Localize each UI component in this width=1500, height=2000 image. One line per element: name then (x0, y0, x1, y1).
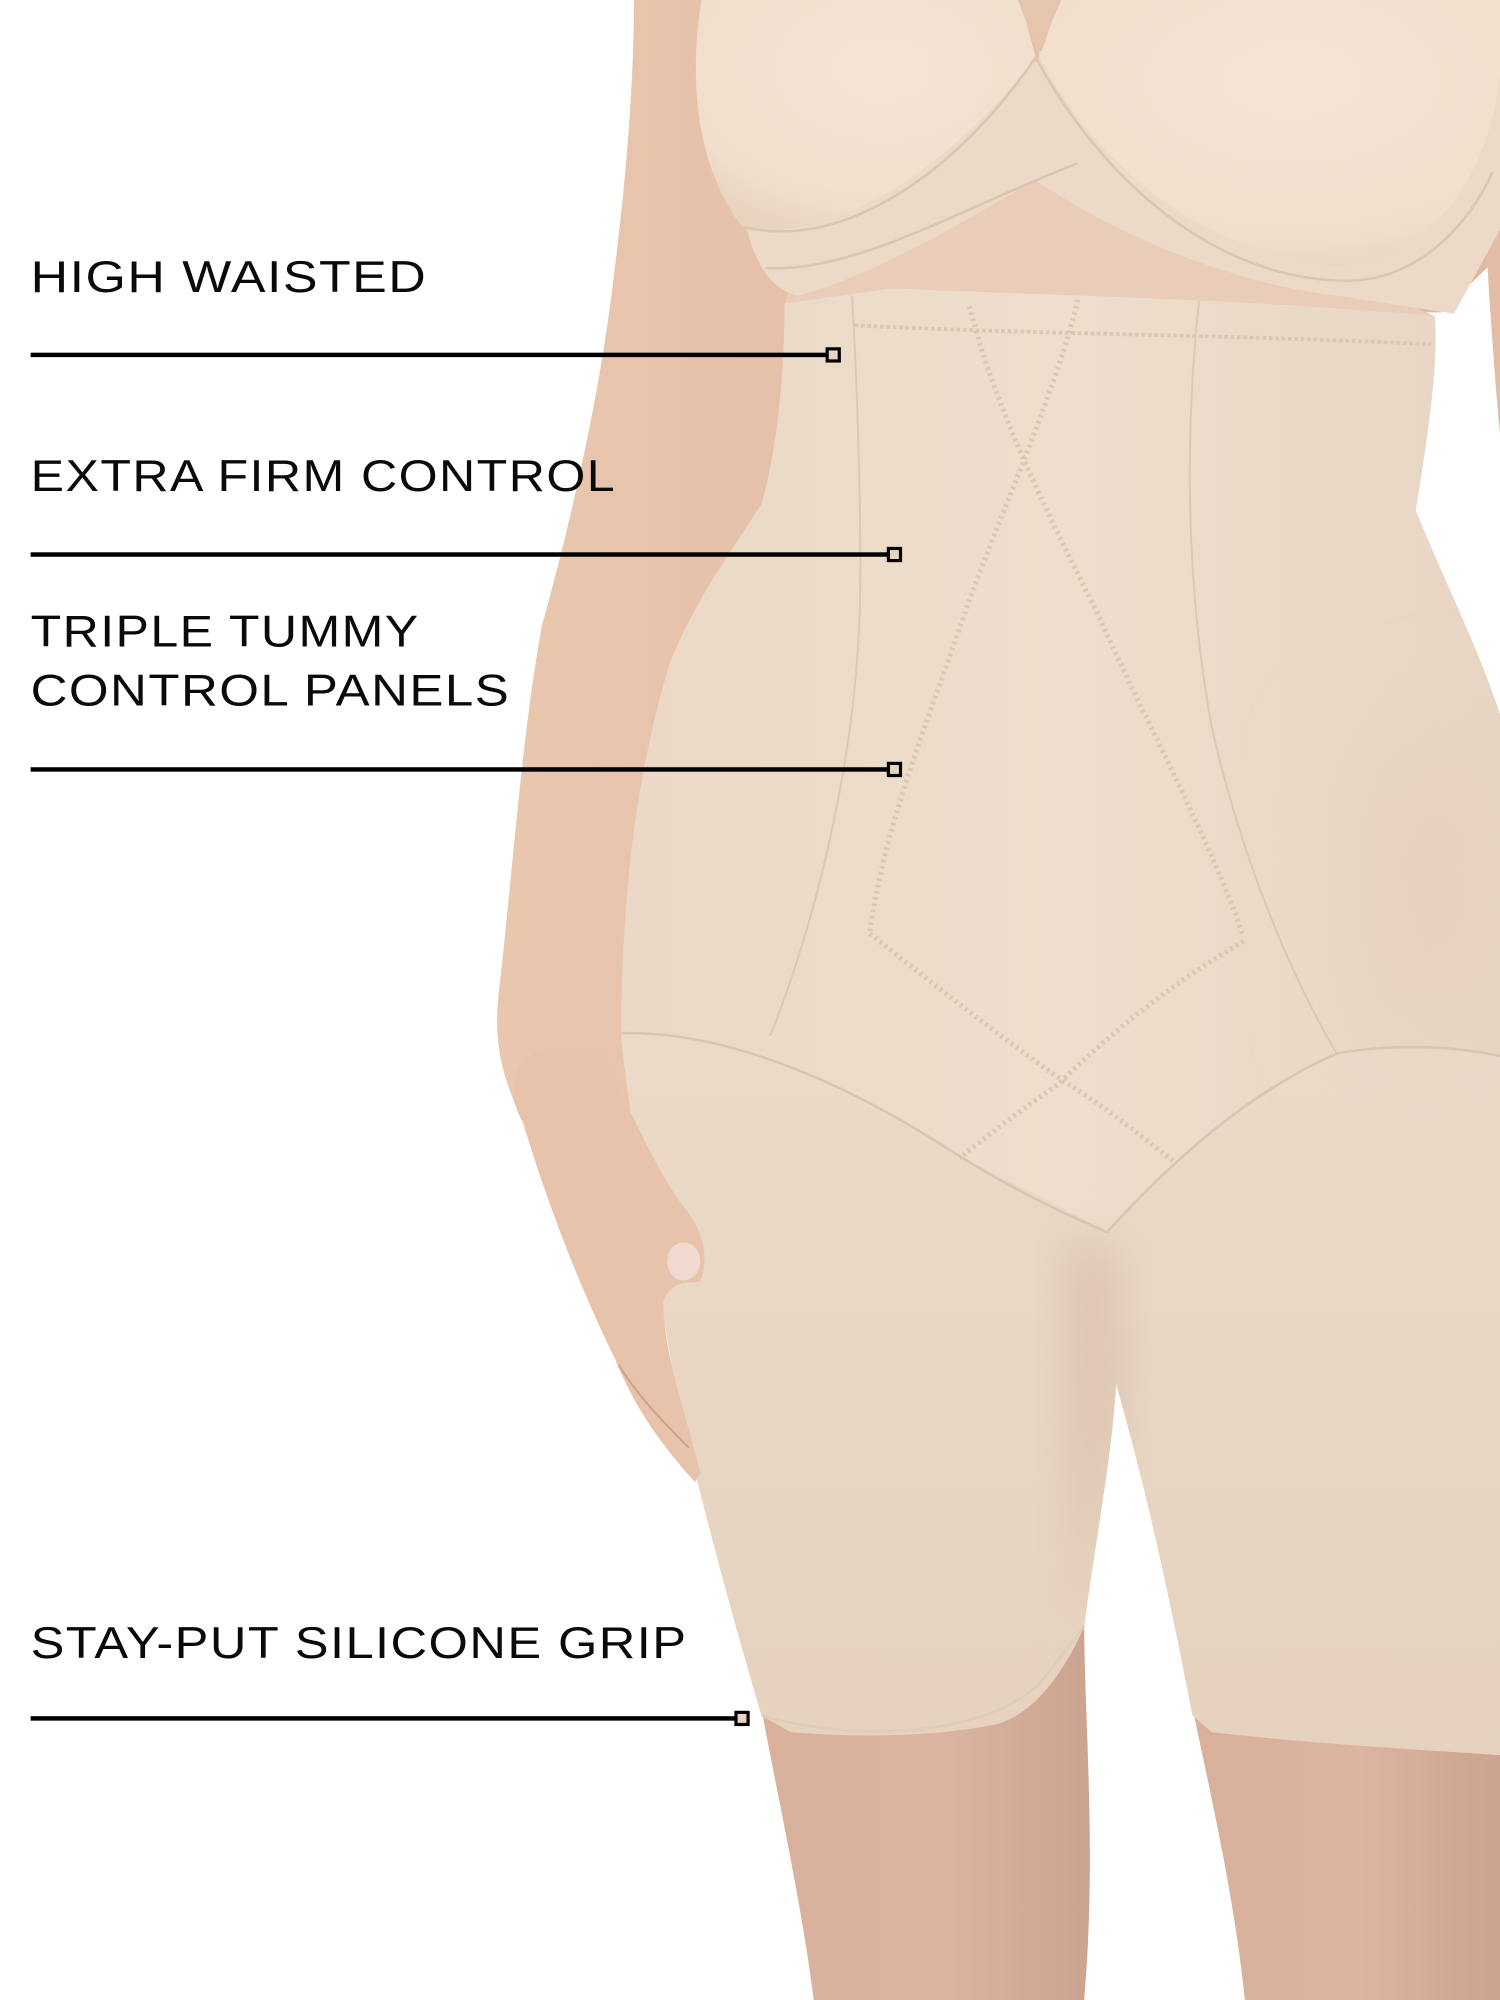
bra (696, 0, 1500, 316)
hand (513, 1048, 704, 1482)
callout: high waisted (31, 253, 839, 361)
hand shape (513, 1048, 704, 1482)
left leg (761, 1620, 1090, 2000)
torso and arm skin (497, 0, 1500, 1122)
leader line (31, 353, 827, 357)
leader line (31, 767, 888, 772)
cleavage (1018, 0, 1061, 54)
marker (888, 548, 901, 561)
right leg (1193, 1709, 1500, 2000)
marker (736, 1712, 748, 1724)
label line two: CONTROL PANELS (31, 666, 510, 715)
callout: extra firm control (31, 452, 901, 561)
figure (497, 0, 1500, 2000)
marker (888, 763, 901, 776)
label: EXTRA FIRM CONTROL (31, 452, 616, 501)
label: HIGH WAISTED (31, 253, 427, 302)
leader line (31, 552, 888, 557)
label line one: TRIPLE TUMMY (31, 608, 420, 657)
bra band left (744, 51, 1082, 296)
left cup (696, 0, 1036, 230)
marker (827, 349, 839, 361)
inner thigh shadow (1058, 1242, 1128, 1524)
finger lines (619, 1365, 689, 1448)
midriff skin (784, 159, 1435, 316)
nail (667, 1242, 700, 1281)
right cup (1040, 0, 1500, 266)
bra band right (1024, 51, 1500, 314)
garment shading (621, 714, 1500, 1786)
leader line (31, 1716, 736, 1721)
thigh panels (664, 1312, 1496, 1755)
shaper garment (621, 288, 1500, 1755)
bra seams (744, 57, 1492, 281)
central tummy panel seams (621, 296, 1500, 1731)
right arm sliver (1486, 230, 1500, 434)
side panel shadow (1352, 714, 1500, 1033)
label: STAY-PUT SILICONE GRIP (31, 1619, 687, 1668)
callout: triple tummy control panels (31, 608, 901, 776)
callout: stay-put silicone grip (31, 1619, 748, 1724)
zigzag tummy stitching (870, 300, 1244, 1163)
